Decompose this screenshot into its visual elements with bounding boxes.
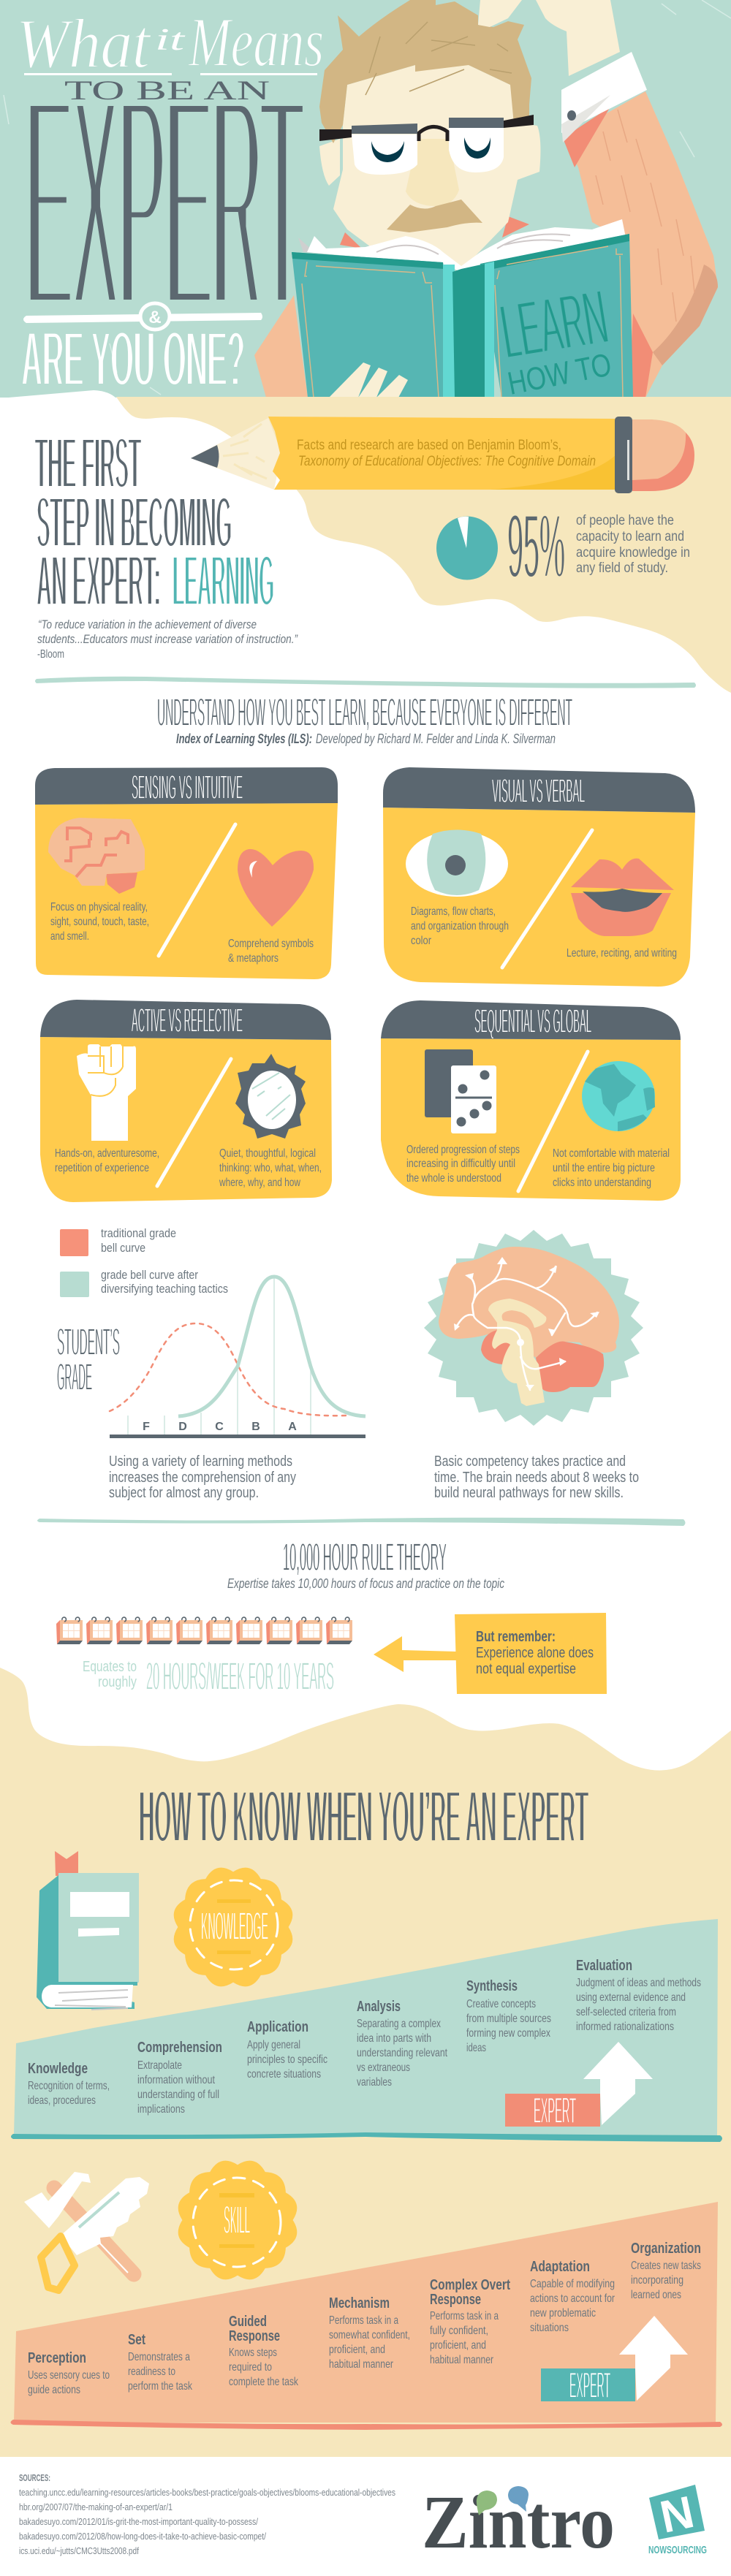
stage: complex overt response: fully confident,	[430, 2325, 488, 2337]
heading: the first step in becoming an expert: THE FIRST	[35, 421, 141, 505]
panel: active vs reflective	[40, 1000, 332, 1202]
stage: analysis: vs extraneous	[357, 2062, 410, 2074]
infographic canvas: KNOWLEDGE	[201, 1904, 268, 1948]
pencil text: Facts and research are based on Benjamin Bloom’s,	[297, 438, 561, 453]
badge: skill: SKILL	[224, 2198, 250, 2242]
stage: complex overt response: proficient, and	[430, 2339, 486, 2352]
stage: synthesis	[466, 1978, 551, 2054]
icon: heart	[238, 849, 314, 927]
stage: comprehension: understanding of full	[137, 2089, 219, 2101]
divider slash	[502, 830, 592, 968]
swatch: after diversifying	[60, 1272, 89, 1297]
stat text: acquire knowledge in	[576, 545, 690, 561]
stage: complex overt response: Complex Overt	[430, 2277, 510, 2293]
stage: comprehension: information without	[137, 2074, 215, 2086]
stage: mechanism: somewhat confident,	[329, 2329, 410, 2341]
label: traditional	[101, 1226, 176, 1255]
stage: knowledge: ideas, procedures	[28, 2094, 96, 2107]
left text: Focus on physical reality,	[50, 901, 148, 913]
left text: and organization through	[411, 920, 509, 932]
illustration: brain with neural pathways	[424, 1230, 643, 1426]
finger in hair	[478, 0, 522, 27]
subheading: index of learning styles: Developed by Richard M. Felder and Linda K. Silverman	[316, 732, 556, 746]
pencil callout	[191, 417, 694, 493]
left text	[55, 1147, 159, 1174]
stage: comprehension: Extrapolate	[137, 2059, 182, 2072]
raised arm	[536, 0, 718, 398]
arrow	[374, 1636, 457, 1672]
subheading: expertise: Expertise takes 10,000 hours of focus and practice on the topic	[227, 1576, 504, 1591]
face	[333, 65, 529, 270]
quote: -Bloom	[37, 648, 64, 661]
hair strands	[366, 22, 512, 95]
stage: complex overt response: Performs task in a	[430, 2310, 499, 2322]
right text: Not comfortable with material	[553, 1147, 670, 1160]
quote	[37, 618, 298, 661]
left text	[411, 905, 509, 947]
infographic canvas: STUDENT’S	[57, 1321, 120, 1364]
chart caption: Using a variety of learning methods	[109, 1454, 292, 1470]
panel: sequential vs global	[381, 1000, 681, 1201]
right text	[228, 938, 314, 965]
quote: students...Educators must increase variation of instruction.”	[37, 632, 298, 646]
pie chart	[436, 516, 498, 580]
callout: but remember: not equal expertise	[476, 1661, 576, 1677]
pencil text	[297, 438, 596, 469]
left text	[406, 1144, 520, 1185]
stage: application: Apply general	[247, 2039, 300, 2051]
divider slash	[159, 824, 235, 956]
infographic canvas: LEARNING	[173, 539, 274, 623]
icon: eye	[406, 830, 508, 897]
stage: guided response: Response	[229, 2328, 280, 2344]
panel: sensing vs intuitive	[35, 767, 338, 979]
grade letters: B	[251, 1421, 260, 1433]
diversified curve	[178, 1277, 366, 1416]
cream wave background	[116, 397, 731, 693]
stage: application	[247, 2019, 327, 2081]
subheading: index of learning styles	[176, 732, 556, 746]
grade letters	[143, 1421, 297, 1433]
stage: guided response: Knows steps	[229, 2347, 277, 2359]
quote: “To reduce variation in the achievement of diverse	[38, 618, 257, 631]
sources: teaching.uncc.edu/learning-resources/articles-books/best-practice/goals-objectives/blooms-educational-objectives	[19, 2487, 395, 2498]
hero title block	[16, 3, 324, 404]
wrench head	[24, 2172, 91, 2228]
cream wave lower background	[0, 1668, 731, 2457]
right text: Lecture, reciting, and writing	[567, 947, 677, 960]
right text: clicks into understanding	[553, 1177, 651, 1189]
badge: skill	[178, 2161, 297, 2279]
stage: knowledge: Knowledge	[28, 2061, 88, 2077]
stage: analysis	[357, 1999, 447, 2089]
stage: perception: guide actions	[28, 2384, 80, 2396]
stage: perception	[28, 2350, 110, 2396]
brain caption: Basic competency takes practice and	[434, 1454, 626, 1470]
sources: SOURCES:	[19, 2472, 50, 2483]
bell curve chart	[110, 1277, 366, 1438]
stage: analysis: Analysis	[357, 1999, 401, 2015]
stage: set: Set	[128, 2332, 145, 2348]
right text	[219, 1147, 322, 1189]
sources: ics.uci.edu/~jutts/CMC3Utts2008.pdf	[19, 2545, 139, 2556]
left text: Diagrams, flow charts,	[411, 905, 496, 918]
stage: organization: incorporating	[631, 2274, 683, 2287]
hero illustration: expert reading a book	[254, 0, 718, 402]
closed eyes	[371, 137, 491, 162]
title: what it means: Means	[188, 3, 324, 81]
left text: the whole is understood	[406, 1172, 501, 1185]
left text: increasing in difficultly until	[406, 1158, 515, 1170]
stage: analysis: Separating a complex	[357, 2018, 441, 2030]
traditional curve	[110, 1323, 347, 1416]
grade letters: F	[143, 1421, 150, 1433]
callout: but remember: Experience alone does	[476, 1645, 594, 1661]
axis title: student's grade	[57, 1321, 120, 1399]
label: traditional: bell curve	[101, 1241, 145, 1255]
stage: synthesis: Synthesis	[466, 1978, 518, 1994]
right text: where, why, and how	[219, 1177, 300, 1189]
stage: adaptation: situations	[530, 2322, 569, 2334]
stage: knowledge: Recognition of terms,	[28, 2080, 110, 2092]
right text: Quiet, thoughtful, logical	[219, 1147, 316, 1160]
label: after diversifying: diversifying teaching tactics	[101, 1282, 228, 1296]
expert arrow	[505, 2042, 653, 2131]
expert arrow	[541, 2316, 688, 2406]
stage: application: Application	[247, 2019, 308, 2035]
logo: nowsourcing	[648, 2485, 707, 2556]
stage: comprehension: Comprehension	[137, 2040, 222, 2056]
stage: adaptation	[530, 2259, 616, 2334]
open book	[292, 219, 633, 402]
title: what it means	[16, 3, 324, 83]
right text: until the entire big picture	[553, 1162, 655, 1174]
hair	[319, 0, 531, 143]
chart caption	[109, 1454, 296, 1501]
stage: synthesis: ideas	[466, 2042, 486, 2054]
sources	[19, 2472, 395, 2556]
book title: learn how to: HOW TO	[505, 346, 614, 402]
left text	[50, 901, 149, 943]
brain caption	[434, 1454, 639, 1501]
stage: set: Demonstrates a	[128, 2351, 190, 2363]
stage: mechanism: proficient, and	[329, 2344, 385, 2356]
white corner blob	[0, 390, 117, 403]
knowledge ramp chart	[11, 1919, 722, 2142]
stage: perception: Perception	[28, 2350, 86, 2366]
grade letters: A	[288, 1421, 297, 1433]
left sleeve	[254, 295, 308, 398]
book title: learn how to	[495, 273, 614, 402]
stage: comprehension	[137, 2040, 222, 2116]
stage: organization: Creates new tasks	[631, 2260, 701, 2272]
stage: evaluation: self-selected criteria from	[576, 2006, 676, 2018]
ampersand divider	[23, 303, 262, 330]
right text	[553, 1147, 670, 1189]
grade letters: D	[178, 1421, 187, 1433]
left text: sight, sound, touch, taste,	[50, 916, 149, 928]
stat text: any field of study.	[576, 561, 668, 576]
right text: thinking: who, what, when,	[219, 1162, 322, 1174]
stage: application: principles to specific	[247, 2053, 327, 2066]
stage: complex overt response	[430, 2277, 510, 2366]
heading: the first step in becoming an expert	[35, 421, 274, 623]
stage: guided response: complete the task	[229, 2376, 299, 2388]
pencil text: Taxonomy of Educational Objectives: The Cognitive Domain	[298, 454, 596, 469]
sources: bakadesuyo.com/2012/08/how-long-does-it-take-to-achieve-basic-compet/	[19, 2531, 266, 2542]
nose	[406, 139, 459, 206]
grade letters: C	[215, 1421, 224, 1433]
infographic canvas: GRADE	[57, 1356, 92, 1399]
panel: active vs reflective: ACTIVE VS REFLECTIVE	[132, 1001, 243, 1039]
heading: the first step in becoming an expert: AN EXPERT:	[37, 539, 161, 623]
badge: knowledge	[174, 1868, 292, 1986]
expert arrow: EXPERT	[569, 2365, 610, 2406]
logo: zintro: Zintro	[422, 2480, 615, 2564]
equates to label: roughly	[98, 1674, 137, 1690]
stage: perception: Uses sensory cues to	[28, 2369, 110, 2382]
icon: brain	[48, 818, 145, 894]
stage: synthesis: forming new complex	[466, 2027, 550, 2040]
icon: globe	[582, 1061, 655, 1131]
sources: bakadesuyo.com/2012/01/is-grit-the-most-important-quality-to-possess/	[19, 2516, 258, 2527]
stage: evaluation: using external evidence and	[576, 1991, 686, 2004]
callout: but remember	[455, 1613, 607, 1694]
calendars	[56, 1617, 352, 1644]
stage: adaptation: actions to account for	[530, 2292, 616, 2305]
stage: evaluation: informed rationalizations	[576, 2021, 674, 2033]
stage: synthesis: Creative concepts	[466, 1998, 536, 2010]
axis	[110, 1435, 366, 1438]
subheading: index of learning styles: Index of Learning Styles (ILS):	[176, 732, 312, 746]
title: to be an: TO BE AN	[64, 76, 270, 106]
stage: application: concrete situations	[247, 2068, 321, 2081]
left text: color	[411, 935, 432, 947]
equates to label	[83, 1659, 137, 1690]
panel: sensing vs intuitive: SENSING VS INTUITIVE	[132, 768, 243, 806]
left text: repetition of experience	[55, 1162, 149, 1174]
hand on book	[329, 362, 408, 398]
stat text	[576, 513, 690, 576]
label: after diversifying: grade bell curve after	[101, 1268, 198, 1282]
icon: fist	[77, 1044, 136, 1141]
divider slash	[157, 1059, 231, 1186]
stage: organization: Organization	[631, 2241, 701, 2257]
stat text: of people have the	[576, 513, 674, 528]
neural pathway arrows	[454, 1257, 599, 1390]
title: what it means: What	[16, 4, 151, 83]
stage: mechanism: Performs task in a	[329, 2314, 398, 2327]
stage: analysis: understanding relevant	[357, 2047, 447, 2059]
label: after diversifying	[101, 1268, 228, 1296]
stage: synthesis: from multiple sources	[466, 2013, 551, 2025]
stage: analysis: variables	[357, 2076, 392, 2089]
stage: mechanism	[329, 2295, 410, 2371]
equates to label: Equates to	[83, 1659, 137, 1675]
stage: adaptation: Capable of modifying	[530, 2278, 615, 2290]
icon: dominoes	[425, 1049, 496, 1133]
collar	[340, 216, 529, 248]
infographic canvas: ARE YOU ONE?	[21, 314, 245, 404]
right text: & metaphors	[228, 952, 279, 965]
right text: Comprehend symbols	[228, 938, 314, 950]
glasses	[319, 115, 534, 175]
panel: visual vs verbal	[383, 767, 695, 987]
stat text: capacity to learn and	[576, 529, 684, 544]
chart caption: subject for almost any group.	[109, 1485, 259, 1501]
swatch: traditional	[60, 1229, 88, 1256]
expert arrow: EXPERT	[534, 2090, 576, 2131]
stage: complex overt response: Response	[430, 2292, 481, 2308]
stage: adaptation: new problematic	[530, 2307, 596, 2319]
stage: guided response	[229, 2314, 299, 2388]
stage: guided response: required to	[229, 2361, 272, 2374]
stage: set: readiness to	[128, 2366, 175, 2378]
left text: and smell.	[50, 930, 89, 943]
title: what it means: it	[155, 23, 186, 57]
brain caption: build neural pathways for new skills.	[434, 1485, 624, 1501]
skill ramp chart	[10, 2202, 722, 2430]
stage: organization: learned ones	[631, 2289, 681, 2301]
ears	[319, 123, 540, 186]
logo: nowsourcing: N	[656, 2487, 698, 2543]
left text: Hands-on, adventuresome,	[55, 1147, 159, 1160]
ampersand divider: &	[148, 308, 162, 327]
stage: comprehension: implications	[137, 2103, 185, 2116]
saw	[61, 2177, 149, 2255]
stage: set	[128, 2332, 193, 2393]
icon: book	[37, 1851, 139, 2010]
callout: but remember: But remember:	[476, 1629, 556, 1645]
stage: evaluation: Evaluation	[576, 1958, 632, 1974]
stage: complex overt response: habitual manner	[430, 2354, 494, 2366]
brain caption: time. The brain needs about 8 weeks to	[434, 1470, 639, 1486]
wrench handle	[54, 2188, 134, 2274]
mustache	[387, 200, 482, 232]
stage: analysis: idea into parts with	[357, 2032, 431, 2045]
hero background	[0, 0, 731, 398]
chart caption: increases the comprehension of any	[109, 1470, 296, 1486]
icon: lips	[571, 859, 674, 936]
label: traditional: traditional grade	[101, 1226, 176, 1240]
stage: adaptation: Adaptation	[530, 2259, 590, 2275]
left text: Ordered progression of steps	[406, 1144, 520, 1156]
stage: set: perform the task	[128, 2380, 193, 2393]
stage: mechanism: Mechanism	[329, 2295, 390, 2311]
stage: knowledge	[28, 2061, 110, 2107]
stage: organization	[631, 2241, 701, 2301]
legend	[60, 1226, 228, 1297]
stat: 95 percent: 95%	[507, 497, 565, 597]
divider slash	[518, 1052, 588, 1191]
icon: mirror	[235, 1054, 306, 1139]
icon: tools	[24, 2172, 149, 2290]
stage: mechanism: habitual manner	[329, 2358, 394, 2371]
sources: hbr.org/2007/07/the-making-of-an-expert/ar/1	[19, 2501, 173, 2512]
stage: evaluation	[576, 1958, 701, 2033]
stage: guided response: Guided	[229, 2314, 267, 2330]
